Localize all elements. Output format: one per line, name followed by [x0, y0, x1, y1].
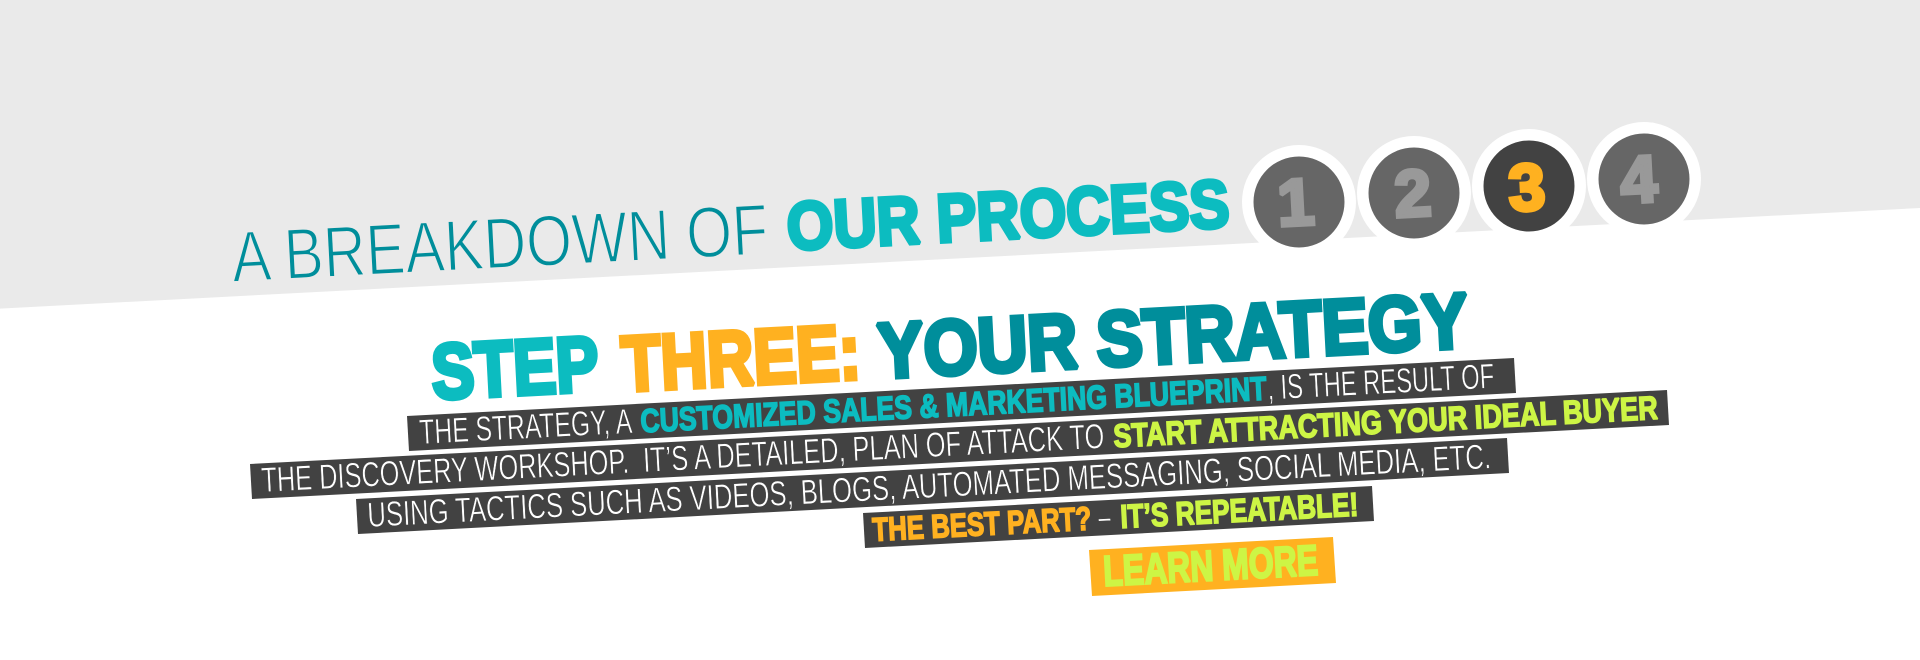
step 4 circle [1587, 122, 1701, 236]
step 2 circle [1357, 136, 1471, 250]
step 3 circle (active) [1472, 129, 1586, 243]
heading: step three your strategy: STEP [429, 319, 601, 416]
text strip line 3: USING TACTICS SUCH AS VIDEOS, BLOGS, AUTOMATED MESSAGING, SOCIAL MEDIA, ETC. [366, 437, 1492, 535]
step 4 circle: 4 [1619, 141, 1659, 217]
text strip line 1: , IS THE RESULT OF [1266, 357, 1495, 408]
text strip line 2: THE DISCOVERY WORKSHOP. IT’S A DETAILED, PLAN OF ATTACK TO [260, 417, 1105, 500]
step 1 circle [1242, 145, 1356, 259]
heading: step three your strategy: YOUR STRATEGY [875, 276, 1470, 395]
text strip line 1: THE STRATEGY, A [418, 402, 634, 452]
heading: step three your strategy: THREE: [619, 308, 863, 408]
title: a breakdown of our process: A BREAKDOWN OF [230, 190, 770, 298]
step indicator circles [1242, 122, 1701, 259]
text strip line 2: START ATTRACTING YOUR IDEAL BUYER [1112, 389, 1659, 454]
text strip line 3 [356, 437, 1509, 535]
title: a breakdown of our process [230, 166, 1231, 298]
title: a breakdown of our process: OUR PROCESS [785, 166, 1231, 265]
text strip line 4 [863, 486, 1374, 548]
background: slanted grey band [0, 0, 1920, 309]
button: learn more: LEARN MORE [1102, 537, 1319, 596]
step 3 circle (active): 3 [1507, 149, 1547, 225]
step 1 circle: 1 [1276, 164, 1316, 240]
text strip line 1 [407, 357, 1516, 452]
heading: step three your strategy [429, 276, 1470, 416]
step 2 circle: 2 [1393, 155, 1433, 231]
text strip line 4: IT’S REPEATABLE! [1119, 486, 1359, 535]
text strip line 1: CUSTOMIZED SALES & MARKETING BLUEPRINT [639, 370, 1268, 439]
text strip line 4: – [1097, 497, 1112, 537]
text strip line 4: THE BEST PART? [871, 500, 1092, 548]
